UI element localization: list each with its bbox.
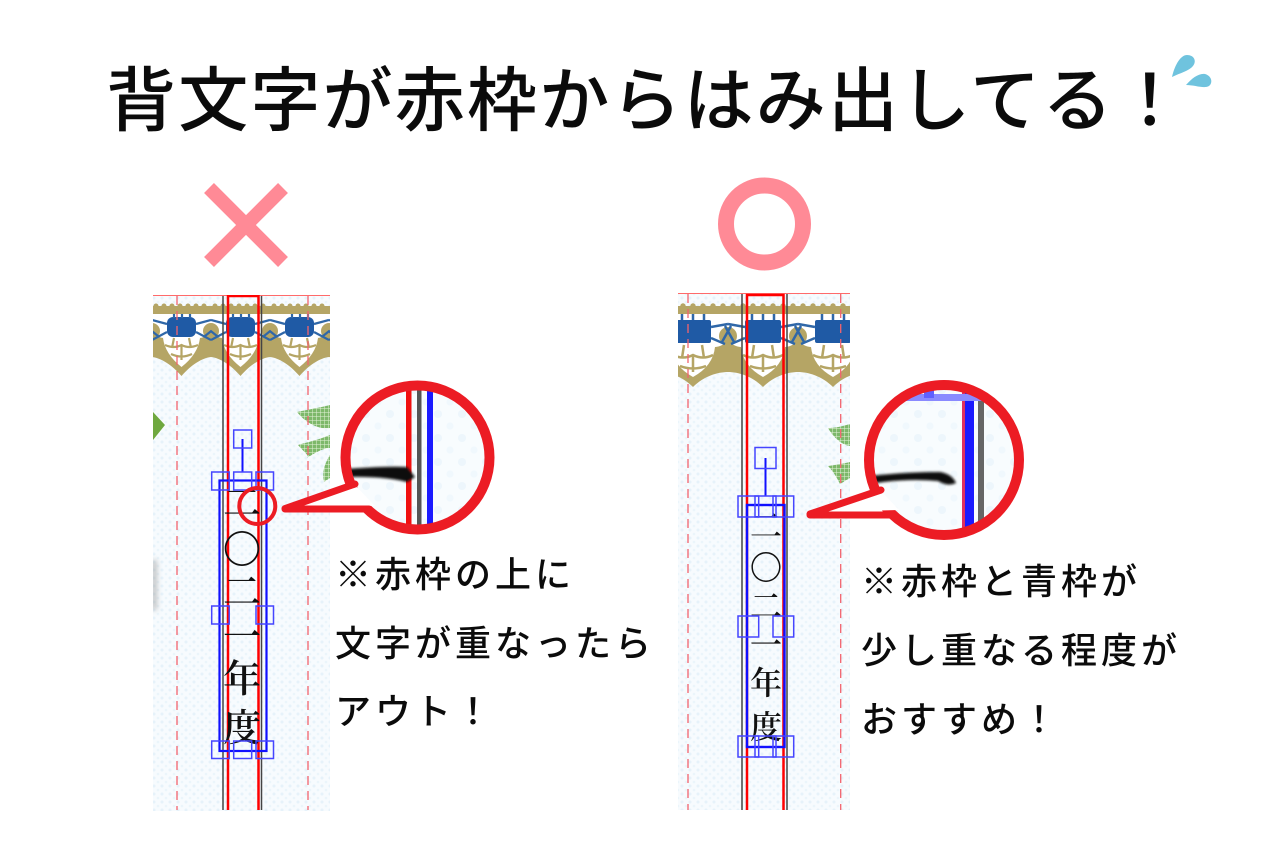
- note: bad example: [335, 554, 655, 732]
- blue selection frame: [212, 430, 274, 758]
- icon: circle mark: [726, 186, 803, 262]
- lace trim: [153, 300, 330, 380]
- vertical text: 二〇二一年度: 〇: [750, 550, 782, 586]
- note: good example: 少し重なる程度が: [861, 630, 1181, 671]
- vertical text: 二〇二一年度: 二: [750, 588, 782, 624]
- vertical text: 二〇二一年度: 一: [223, 617, 261, 659]
- note: good example: おすすめ！: [861, 699, 1061, 740]
- vertical text: 二〇二一年度: 二: [223, 483, 261, 525]
- note: good example: [861, 561, 1181, 740]
- vertical text: 二〇二一年度: [750, 508, 782, 745]
- lace trim: [678, 300, 850, 390]
- icon: sweat drops: [1172, 55, 1211, 87]
- panel: good example: [678, 293, 850, 810]
- vertical text: 二〇二一年度: 度: [750, 709, 782, 745]
- green decorations: [828, 424, 850, 484]
- vertical text: 二〇二一年度: 度: [223, 708, 261, 750]
- note: bad example: 文字が重なったら: [335, 623, 655, 664]
- vertical text: 二〇二一年度: 二: [750, 508, 782, 544]
- vertical text: 二〇二一年度: 一: [750, 627, 782, 663]
- note: good example: ※赤枠と青枠が: [861, 561, 1141, 602]
- guide lines: [153, 296, 330, 810]
- vertical text: 二〇二一年度: [223, 483, 261, 750]
- callout: good example magnifier: [810, 380, 1030, 550]
- vertical text: 二〇二一年度: 〇: [223, 530, 261, 572]
- title: 背文字が赤枠からはみ出してる！: [106, 62, 1187, 140]
- note: bad example: ※赤枠の上に: [335, 554, 575, 595]
- guide lines: [678, 294, 850, 810]
- icon: cross mark: [209, 188, 283, 262]
- panel: bad example: [153, 295, 330, 811]
- vertical text: 二〇二一年度: 年: [223, 659, 261, 701]
- callout: bad example magnifier: [239, 380, 500, 540]
- vertical text: 二〇二一年度: 年: [750, 665, 782, 701]
- blue selection frame: [738, 448, 794, 757]
- note: bad example: アウト！: [335, 691, 495, 732]
- vertical text: 二〇二一年度: 二: [223, 572, 261, 614]
- green decorations: [153, 405, 330, 610]
